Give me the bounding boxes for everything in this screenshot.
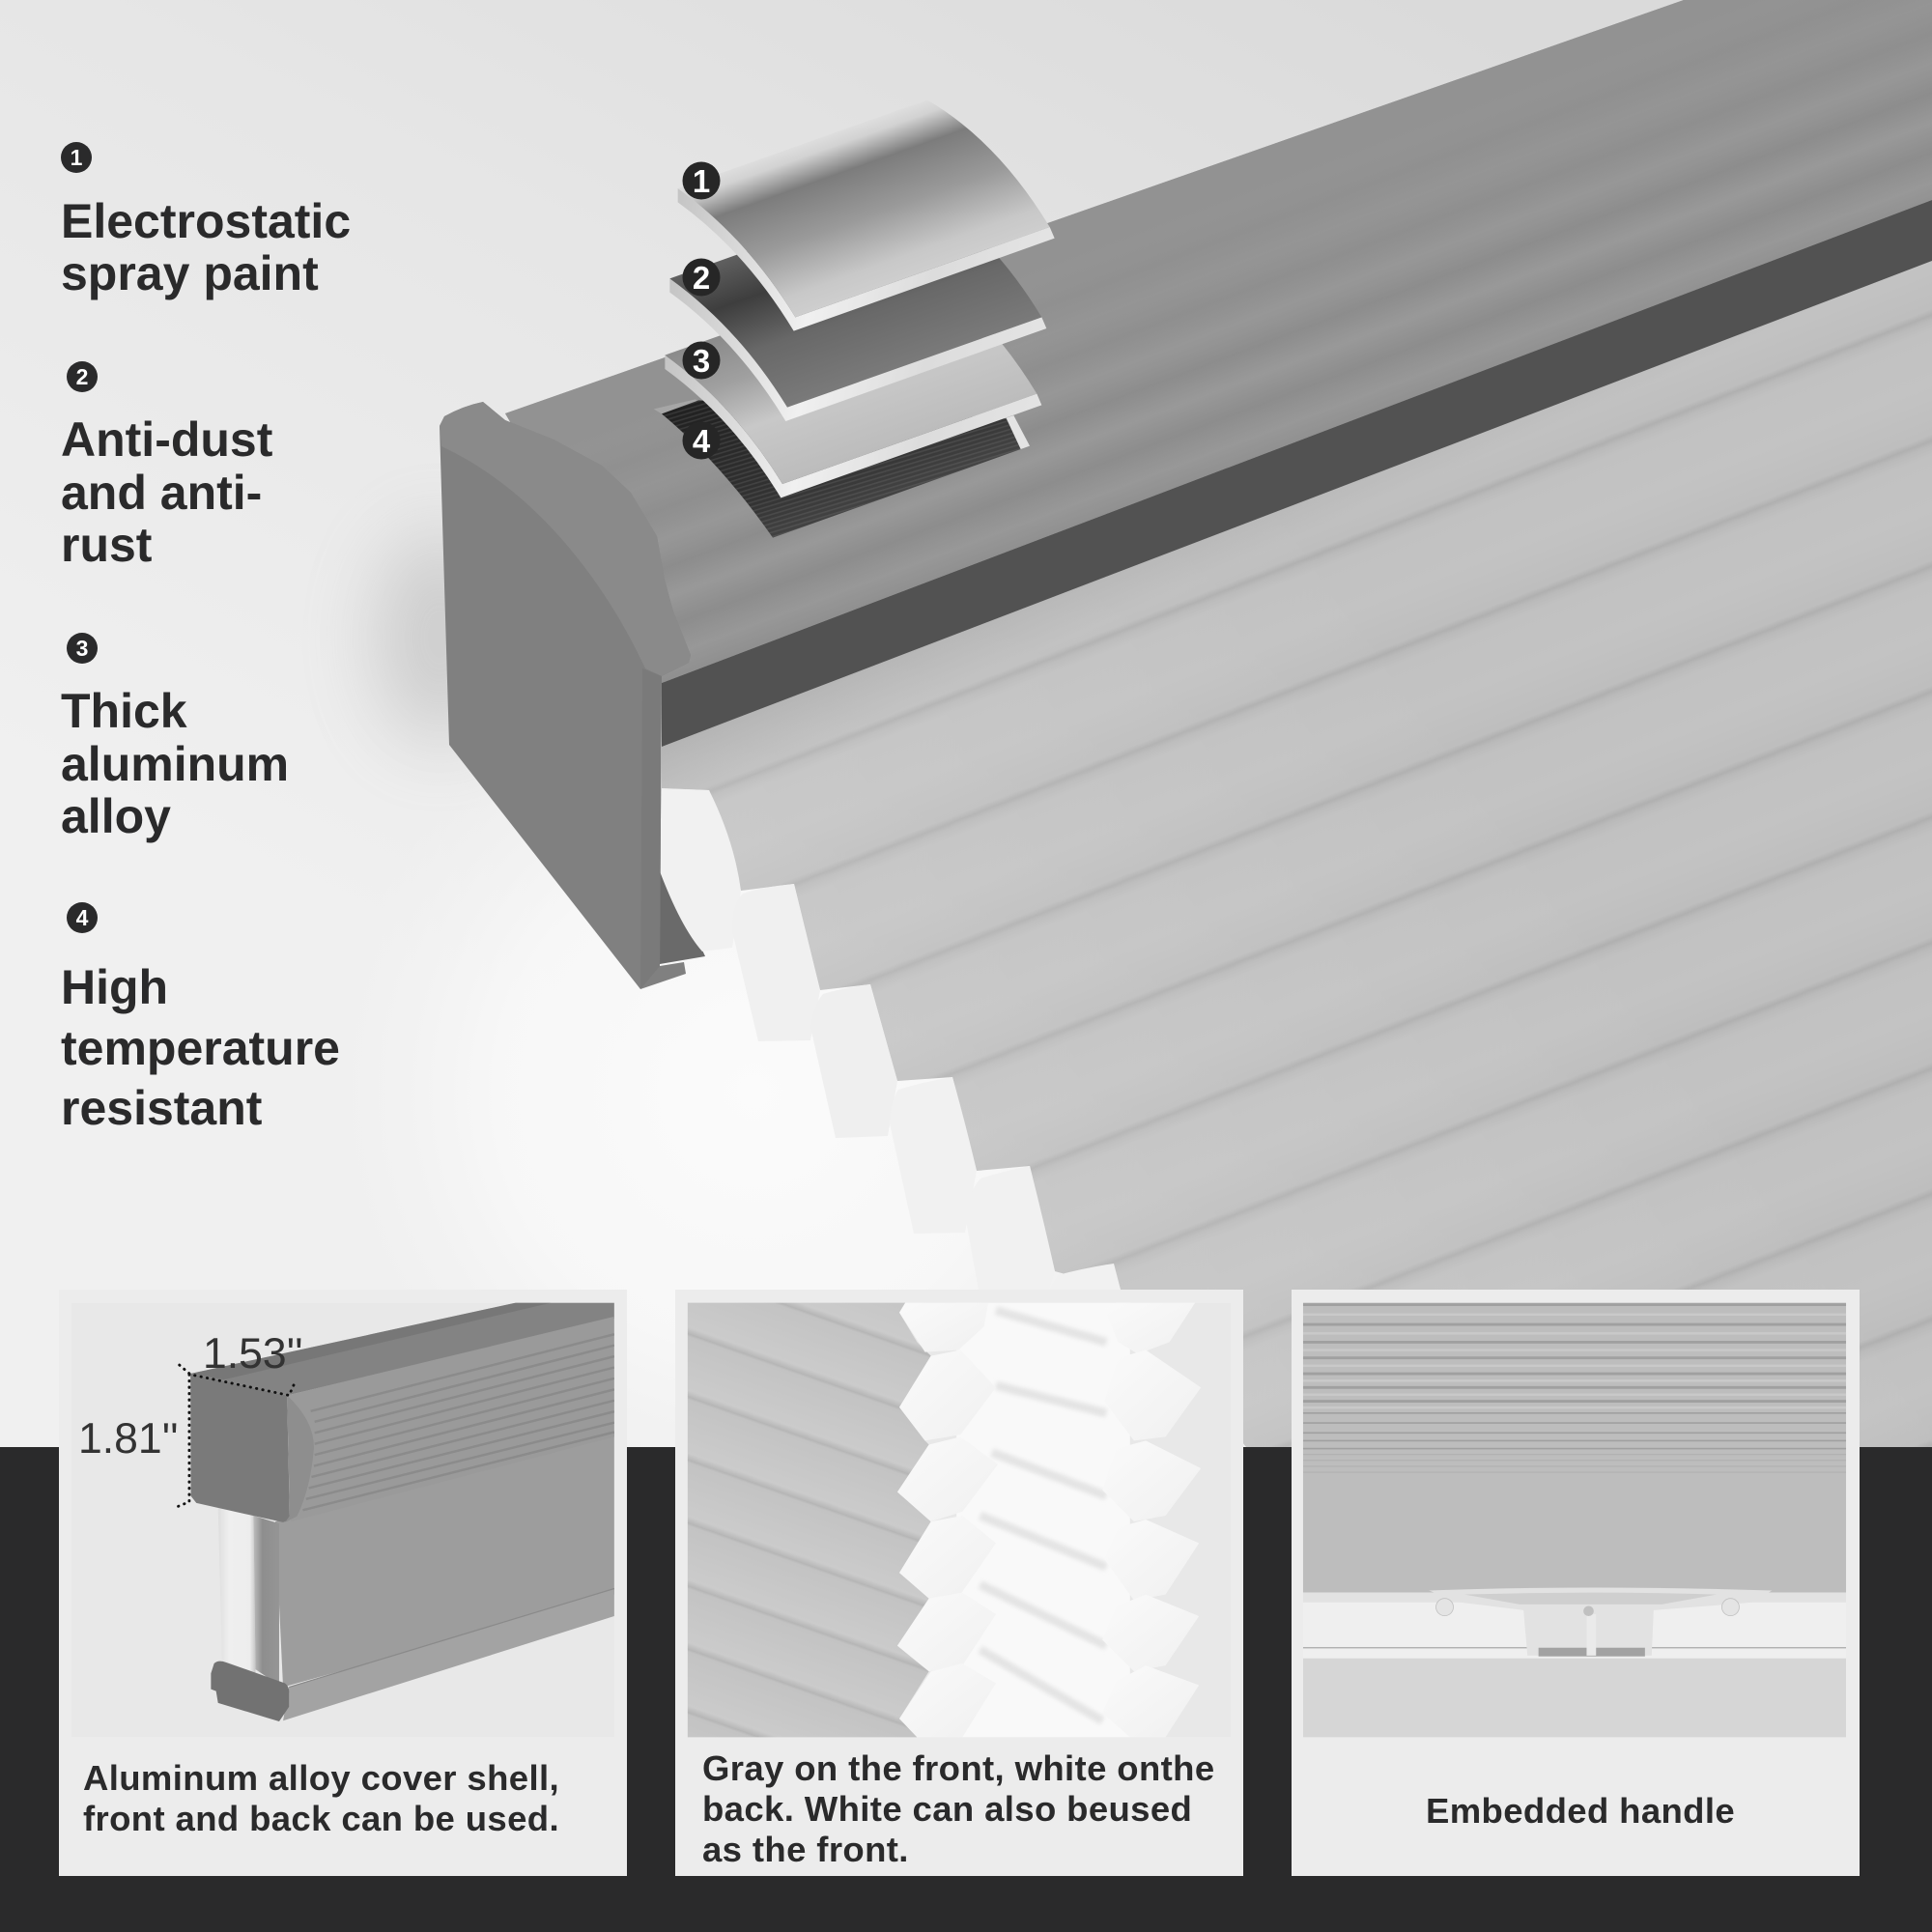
white pleat backs <box>660 788 1121 1290</box>
legend item 4: 4 <box>76 905 89 930</box>
layer 3: aluminum <box>665 267 1041 497</box>
layer badge 2: 2 <box>693 260 710 296</box>
product: headrail and shade <box>440 0 1932 1447</box>
legend item 1: 1 <box>71 145 83 170</box>
inner bracket <box>660 869 705 964</box>
dimension: depth: 1.53'' <box>203 1330 303 1378</box>
legend item 2: Anti-dust <box>61 412 273 467</box>
dark bottom band <box>0 1447 1932 1932</box>
headrail illustration <box>190 1303 614 1721</box>
white back panel <box>956 1303 1130 1737</box>
legend item 4: resistant <box>61 1081 263 1135</box>
legend item 3 <box>61 633 289 843</box>
rail top surface <box>505 0 1932 683</box>
panel: aluminum cover shell <box>59 1290 627 1876</box>
end cap <box>440 402 691 989</box>
caption: Embedded handle <box>1426 1791 1735 1831</box>
caption: Gray on the front, white onthe <box>702 1748 1215 1788</box>
legend item 4: High <box>61 960 168 1014</box>
photo backdrop <box>688 1303 1231 1737</box>
exploded material layers <box>654 99 1055 538</box>
legend item 3: 3 <box>76 636 88 661</box>
end cap wall shadow <box>377 531 502 744</box>
photo backdrop <box>71 1303 614 1737</box>
caption: back. White can also beused <box>702 1789 1192 1829</box>
layer 2: anti-dust <box>669 190 1046 421</box>
caption: Aluminum alloy cover shell, <box>83 1758 559 1798</box>
panel: embedded handle <box>1292 1290 1860 1876</box>
pleat illustration <box>688 1303 1201 1737</box>
layer badge 1: 1 <box>693 163 710 199</box>
legend item 2: and anti- <box>61 466 262 520</box>
panel: gray front, white back <box>675 1290 1243 1876</box>
layer badge 3: 3 <box>693 343 710 379</box>
legend item 3: Thick <box>61 684 187 738</box>
legend item 2: rust <box>61 518 153 572</box>
layer badge 4 <box>682 421 721 460</box>
background wall <box>0 0 1932 1449</box>
caption: as the front. <box>702 1830 909 1869</box>
legend item 1: Electrostatic <box>61 194 351 248</box>
rail surface shading <box>505 0 1932 683</box>
legend item 2 <box>61 361 273 572</box>
legend item 2: 2 <box>76 364 88 389</box>
shade bottom illustration <box>1303 1303 1846 1737</box>
layer badge 2 <box>682 259 721 296</box>
wall highlight <box>193 676 1256 1449</box>
handle <box>1429 1587 1772 1657</box>
caption: front and back can be used. <box>83 1799 559 1838</box>
legend item 1: spray paint <box>61 246 319 300</box>
shade fabric <box>662 261 1932 1447</box>
caption <box>702 1748 1215 1869</box>
legend item 1 <box>61 142 351 300</box>
legend item 4: temperature <box>61 1021 340 1075</box>
dimension: height: 1.81'' <box>78 1415 179 1463</box>
layer badge 4: 4 <box>693 423 711 459</box>
caption <box>83 1758 559 1838</box>
layer badge 1 <box>682 162 721 199</box>
legend item 4 <box>61 902 340 1135</box>
layer badge 3 <box>682 342 721 379</box>
shadow below rail <box>662 261 1932 824</box>
layer 4: brushes <box>654 399 1030 538</box>
rail front dark band <box>662 200 1932 747</box>
legend item 3: alloy <box>61 789 171 843</box>
dimension dotted lines <box>177 1365 295 1507</box>
legend item 3: aluminum <box>61 737 289 791</box>
layer 1: spray paint <box>678 99 1055 331</box>
fabric light falloff <box>662 261 1932 1447</box>
